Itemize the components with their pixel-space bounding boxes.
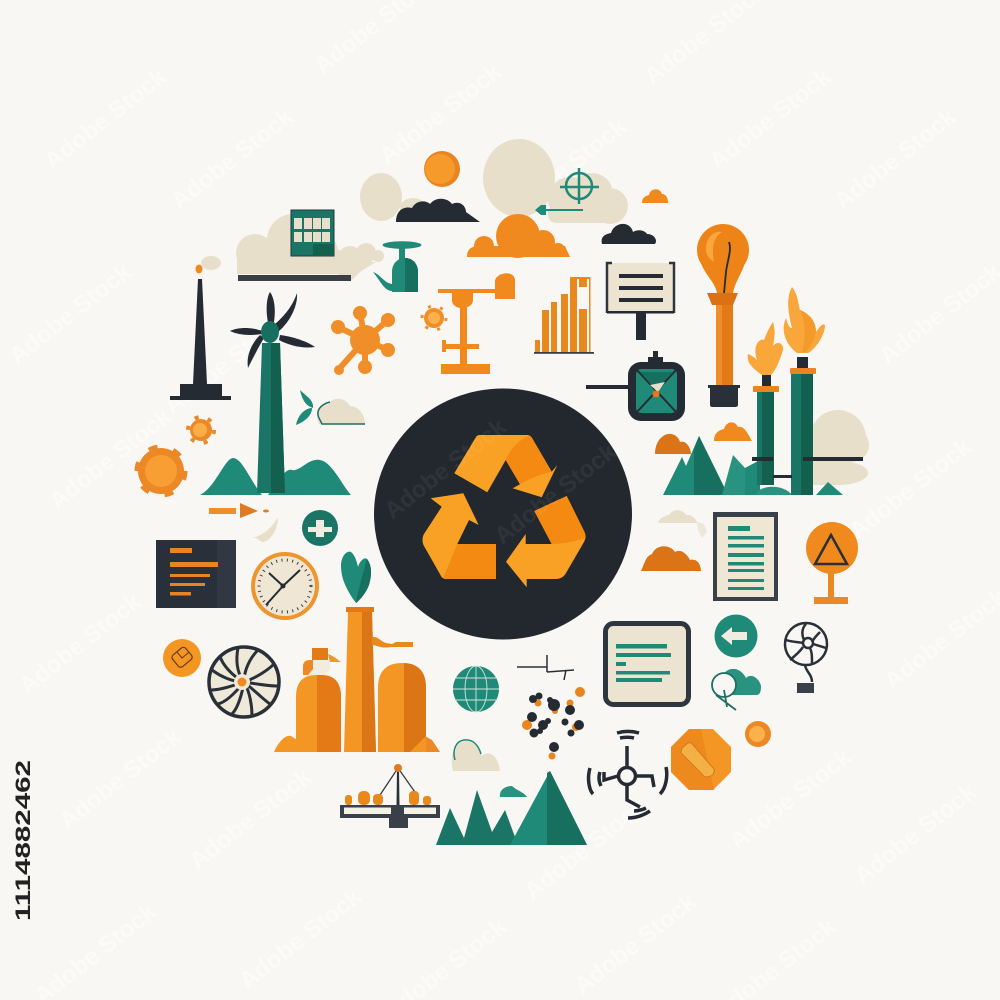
beige cloud cluster top centre	[360, 139, 628, 224]
orange factory	[274, 607, 440, 752]
watermark pattern: Adobe Stock	[159, 308, 292, 420]
teal mountains bottom	[436, 771, 587, 845]
beige cloud behind stacks	[808, 410, 869, 485]
wall clock	[251, 552, 319, 620]
wind turbine	[200, 292, 351, 495]
beige cloud with leaves	[296, 390, 365, 425]
dark line plane	[517, 655, 574, 680]
teal crosshair icon	[560, 168, 599, 204]
watermark pattern: Adobe Stock	[569, 888, 702, 1000]
twin flaming stacks	[748, 287, 863, 495]
orange arrow and feather	[209, 503, 278, 542]
document panel	[713, 512, 778, 601]
warning sign	[806, 522, 858, 604]
watermark pattern: Adobe Stock	[14, 588, 147, 700]
valve gauge box	[586, 351, 685, 421]
small orange sun badge	[745, 721, 771, 747]
watermark pattern: Adobe Stock	[234, 883, 367, 995]
teal key	[535, 205, 583, 215]
watermark on disc: Adobe Stock	[379, 413, 512, 525]
deep orange cloud	[641, 546, 701, 571]
dark smokestack	[170, 256, 231, 400]
small orange cloud	[642, 189, 668, 203]
outlined beige cloud	[452, 740, 500, 771]
coal and orange cluster	[522, 687, 585, 760]
watermark pattern: Adobe Stock	[849, 778, 982, 890]
orange cloud	[467, 214, 570, 258]
watermark on disc: Adobe Stock	[489, 438, 622, 550]
watermark pattern: Adobe Stock	[844, 433, 977, 545]
watermark pattern: Adobe Stock	[374, 58, 507, 170]
turbine wheel	[209, 647, 279, 717]
watermark pattern: Adobe Stock	[166, 103, 299, 215]
watermark pattern: Adobe Stock	[704, 63, 837, 175]
beige text card	[606, 624, 688, 704]
recycling symbol	[422, 435, 586, 587]
watermark pattern: Adobe Stock	[499, 113, 632, 225]
watermark pattern: Adobe Stock	[519, 793, 652, 905]
orange cloud	[714, 422, 752, 441]
teal arrow badge	[714, 614, 758, 658]
signboard	[607, 263, 674, 340]
dark fan	[785, 623, 827, 693]
deep orange cloud	[655, 434, 691, 454]
teal cloud with outline	[712, 669, 761, 710]
dark text panel	[156, 540, 236, 608]
teal heart leaf	[341, 552, 371, 603]
watering can	[373, 241, 422, 292]
cloud with window building	[236, 210, 384, 281]
watermark pattern: Adobe Stock	[4, 258, 137, 370]
dark cloud right	[602, 224, 656, 244]
watermark pattern: Adobe Stock	[829, 103, 962, 215]
bar chart	[534, 277, 594, 354]
teal round badge	[302, 510, 338, 546]
orange badge	[163, 639, 201, 677]
small sun gear	[422, 306, 446, 330]
teal globe	[453, 666, 499, 712]
dark four-arm turbine	[589, 732, 667, 818]
orange sun	[424, 151, 460, 187]
teal mountains right	[663, 436, 843, 495]
orange gear large	[137, 447, 185, 495]
watermark pattern: Adobe Stock	[724, 743, 857, 855]
watermark pattern: Adobe Stock	[184, 763, 317, 875]
watermark pattern: Adobe Stock	[54, 723, 187, 835]
crane	[438, 273, 515, 374]
dark cloud top	[396, 199, 480, 222]
balance scale	[340, 764, 440, 828]
orange octagon with handle	[671, 729, 731, 790]
watermark pattern: Adobe Stock	[39, 63, 172, 175]
orange gear small	[188, 417, 214, 443]
image id caption: 1114882462	[12, 760, 35, 921]
small teal cloud	[500, 786, 527, 797]
watermark pattern: Adobe Stock	[44, 403, 177, 515]
beige mini cloud and feather	[658, 510, 707, 538]
virus shape	[331, 306, 395, 375]
light bulb tower	[697, 224, 749, 407]
watermark on disc	[379, 413, 622, 550]
central black disc	[374, 388, 632, 640]
